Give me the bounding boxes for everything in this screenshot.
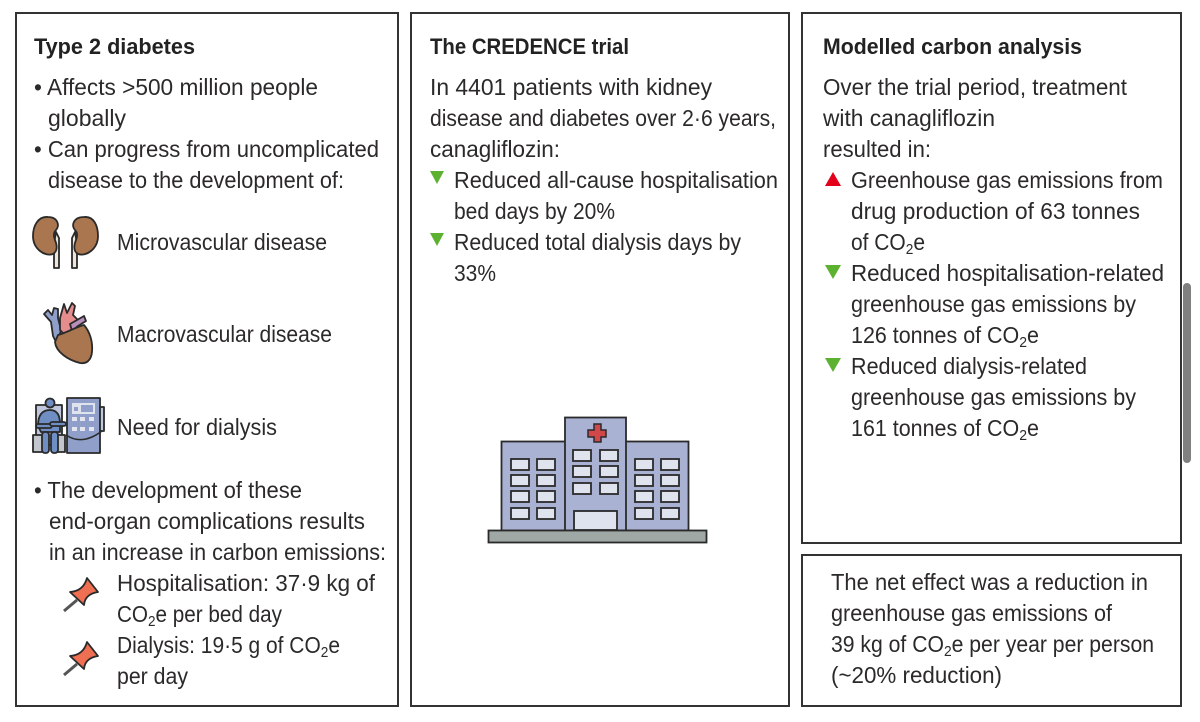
result continuation: 126 tonnes: 2 (1019, 334, 1027, 351)
result: dialysis emissions: Reduced dialysis-related (851, 353, 1087, 379)
panel: type 2 diabetes (16, 13, 398, 706)
result continuation: unit: e (913, 229, 925, 255)
intro line 1: Over the trial period, treatment (823, 74, 1128, 100)
bullet continuation: globally: globally (48, 105, 126, 131)
net effect line 3: e per year per person (952, 631, 1154, 657)
text: dialysis emissions: 2 (321, 644, 328, 661)
bullet: progression: • Can progress from uncomplicated (34, 136, 379, 162)
result continuation: 126 tonnes: 126 tonnes of CO (851, 322, 1031, 348)
intro line 3: resulted in: (823, 136, 931, 162)
text: per day: per day (117, 663, 188, 689)
result continuation: 161 tonnes: 2 (1019, 427, 1027, 444)
label: need for dialysis: Need for dialysis (117, 414, 277, 440)
label: microvascular disease: Microvascular disease (117, 229, 327, 255)
scrollbar (1183, 283, 1191, 463)
arrow: down dialysis emissions (825, 358, 841, 372)
icon: hospital (488, 418, 706, 542)
net effect line 3: 2 (944, 643, 952, 660)
net effect line 1: The net effect was a reduction in (831, 569, 1148, 595)
result: hospitalisation: Reduced all-cause hospitalisation (454, 167, 778, 193)
net effect line 3: 39 kg of CO (831, 631, 954, 657)
arrow: down hospitalisation emissions (825, 265, 841, 279)
icon: pin hospitalisation (64, 578, 98, 611)
text: per bed day: 2 (148, 613, 156, 630)
bullet continuation: development: disease to the development of: (48, 167, 344, 193)
bullet: end-organ complications: • The development of these (34, 477, 302, 503)
intro line 3: canagliflozin: (430, 136, 560, 162)
heading: type 2 diabetes: Type 2 diabetes (34, 34, 195, 59)
intro line 2: disease and diabetes over 2·6 years, (430, 105, 776, 131)
icon: pin dialysis (64, 642, 98, 675)
intro line 2: with canagliflozin (822, 105, 995, 131)
bullet: prevalence: • Affects >500 million people (34, 74, 318, 100)
result continuation: percentage: 33% (454, 260, 496, 286)
label: macrovascular disease: Macrovascular disease (117, 321, 332, 347)
heading: the CREDENCE trial: The CREDENCE trial (430, 34, 629, 59)
result continuation: bed days: bed days by 20% (454, 198, 615, 224)
result continuation: 126 tonnes: e (1027, 322, 1039, 348)
result continuation: 161 tonnes: 161 tonnes of CO (851, 415, 1031, 441)
result: dialysis: Reduced total dialysis days by (454, 229, 741, 255)
result continuation: 161 tonnes: e (1027, 415, 1039, 441)
result continuation: unit: 2 (906, 241, 913, 258)
result continuation: unit: of CO (851, 229, 911, 255)
net effect line 4: (~20% reduction) (831, 662, 1002, 688)
icon: heart (44, 303, 92, 363)
bullet continuation: complications: end-organ complications results (49, 508, 365, 534)
text: hospitalisation emissions: Hospitalisation: 37·9 kg of (117, 570, 376, 596)
icon: dialysis (33, 398, 104, 453)
result: production emissions: Greenhouse gas emissions from (851, 167, 1163, 193)
result continuation: production: drug production of 63 tonnes (851, 198, 1140, 224)
icon: kidneys (33, 217, 98, 268)
result: hospitalisation emissions: Reduced hospitalisation-related (851, 260, 1164, 286)
text: dialysis emissions: e (328, 632, 340, 658)
arrow: down hospitalisation (430, 171, 444, 184)
arrow: down dialysis (430, 233, 444, 246)
panel: modelled carbon analysis (802, 13, 1181, 543)
result continuation: greenhouse gas 2: greenhouse gas emissions by (851, 384, 1136, 410)
intro line 1: In 4401 patients with kidney (430, 74, 712, 100)
panel: the CREDENCE trial (411, 13, 789, 706)
heading: modelled carbon analysis: Modelled carbon analysis (823, 34, 1082, 59)
text: per bed day: CO (117, 601, 152, 627)
arrow: up production (825, 172, 841, 186)
text: dialysis emissions: Dialysis: 19·5 g of CO (117, 632, 341, 658)
panel: net effect (802, 555, 1181, 706)
text: per bed day: e per bed day (156, 601, 282, 627)
net effect line 2: greenhouse gas emissions of (831, 600, 1113, 626)
result continuation: greenhouse gas: greenhouse gas emissions by (851, 291, 1136, 317)
bullet continuation: emissions: in an increase in carbon emissions: (49, 539, 386, 565)
